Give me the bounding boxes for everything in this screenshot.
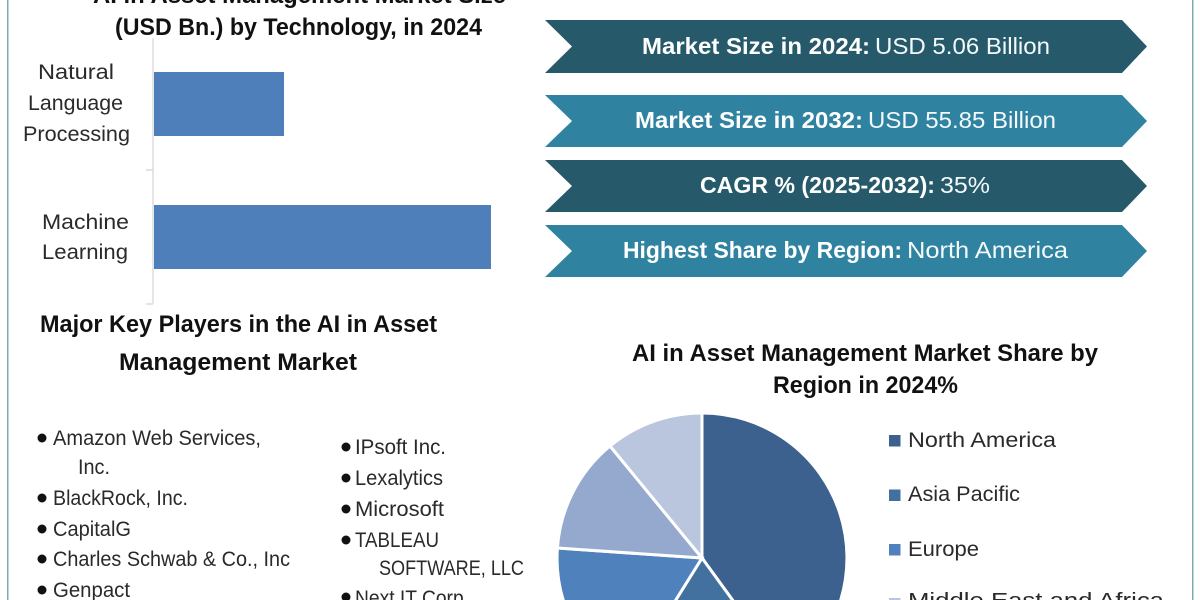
banner: market size 2032: Market Size in 2032: [635,107,863,133]
heading: bar chart title: (USD Bn.) by Technology, in 2024 [115,14,483,41]
heading: bar chart title [93,0,506,41]
banner: highest share by region: Highest Share by Region: [623,237,902,263]
heading: key players title: Major Key Players in the AI in Asset [40,311,437,338]
panel: major key players [38,311,524,600]
banner: CAGR [545,160,1147,212]
list: key players right column: IPsoft Inc. [355,436,446,459]
list: key players right column [342,436,524,600]
legend: North America [908,429,1056,452]
bar: Machine Learning [154,205,491,269]
heading: pie chart title: AI in Asset Management Market Share by [632,340,1099,367]
chart axis [146,38,153,304]
banner: market size 2024: USD 5.06 Billion [875,33,1050,59]
banner: CAGR: 35% [940,172,990,198]
list: key players right column: Lexalytics [355,467,443,490]
list: key players left column: Inc. [78,456,110,479]
label: Machine Learning: Learning [42,241,128,264]
label: Machine Learning: Machine [42,211,129,234]
label: Natural Language Processing [23,61,130,146]
legend: Asia Pacific [908,483,1020,506]
banner: highest share by region: North America [907,237,1068,263]
banner: highest share by region [545,225,1147,277]
banner: market size 2024 [545,20,1147,73]
list: key players left column: CapitalG [53,518,131,541]
label: Natural Language Processing: Language [28,92,123,115]
list: key players left column: Amazon Web Services, [53,427,261,450]
banner: market size 2024: Market Size in 2024: [642,33,870,59]
list: key players right column: Microsoft [355,498,444,521]
banner: market size 2032: USD 55.85 Billion [868,107,1056,133]
heading: pie chart title: Region in 2024% [773,372,958,399]
legend [889,429,1164,600]
heading: key players title [40,311,437,376]
banner: CAGR: CAGR % (2025-2032): [700,172,935,198]
legend: Europe [908,538,979,561]
bar: Natural Language Processing [154,72,284,136]
list: key players left column: BlackRock, Inc. [53,487,188,510]
panel: key statistics banners [545,20,1147,277]
heading: pie chart title [632,340,1099,399]
panel: bar chart by technology [23,0,506,304]
list: key players right column: SOFTWARE, LLC [379,557,524,580]
pie chart [557,413,847,600]
label: Machine Learning [42,211,129,264]
label: Natural Language Processing: Natural [38,61,114,84]
heading: key players title: Management Market [119,349,357,376]
list: key players left column: Charles Schwab & Co., Inc [53,548,290,571]
banner: market size 2032 [545,95,1147,147]
list: key players right column: TABLEAU [355,529,439,552]
list: key players left column [38,427,290,600]
label: Natural Language Processing: Processing [23,123,130,146]
panel: pie chart by region [557,340,1164,600]
